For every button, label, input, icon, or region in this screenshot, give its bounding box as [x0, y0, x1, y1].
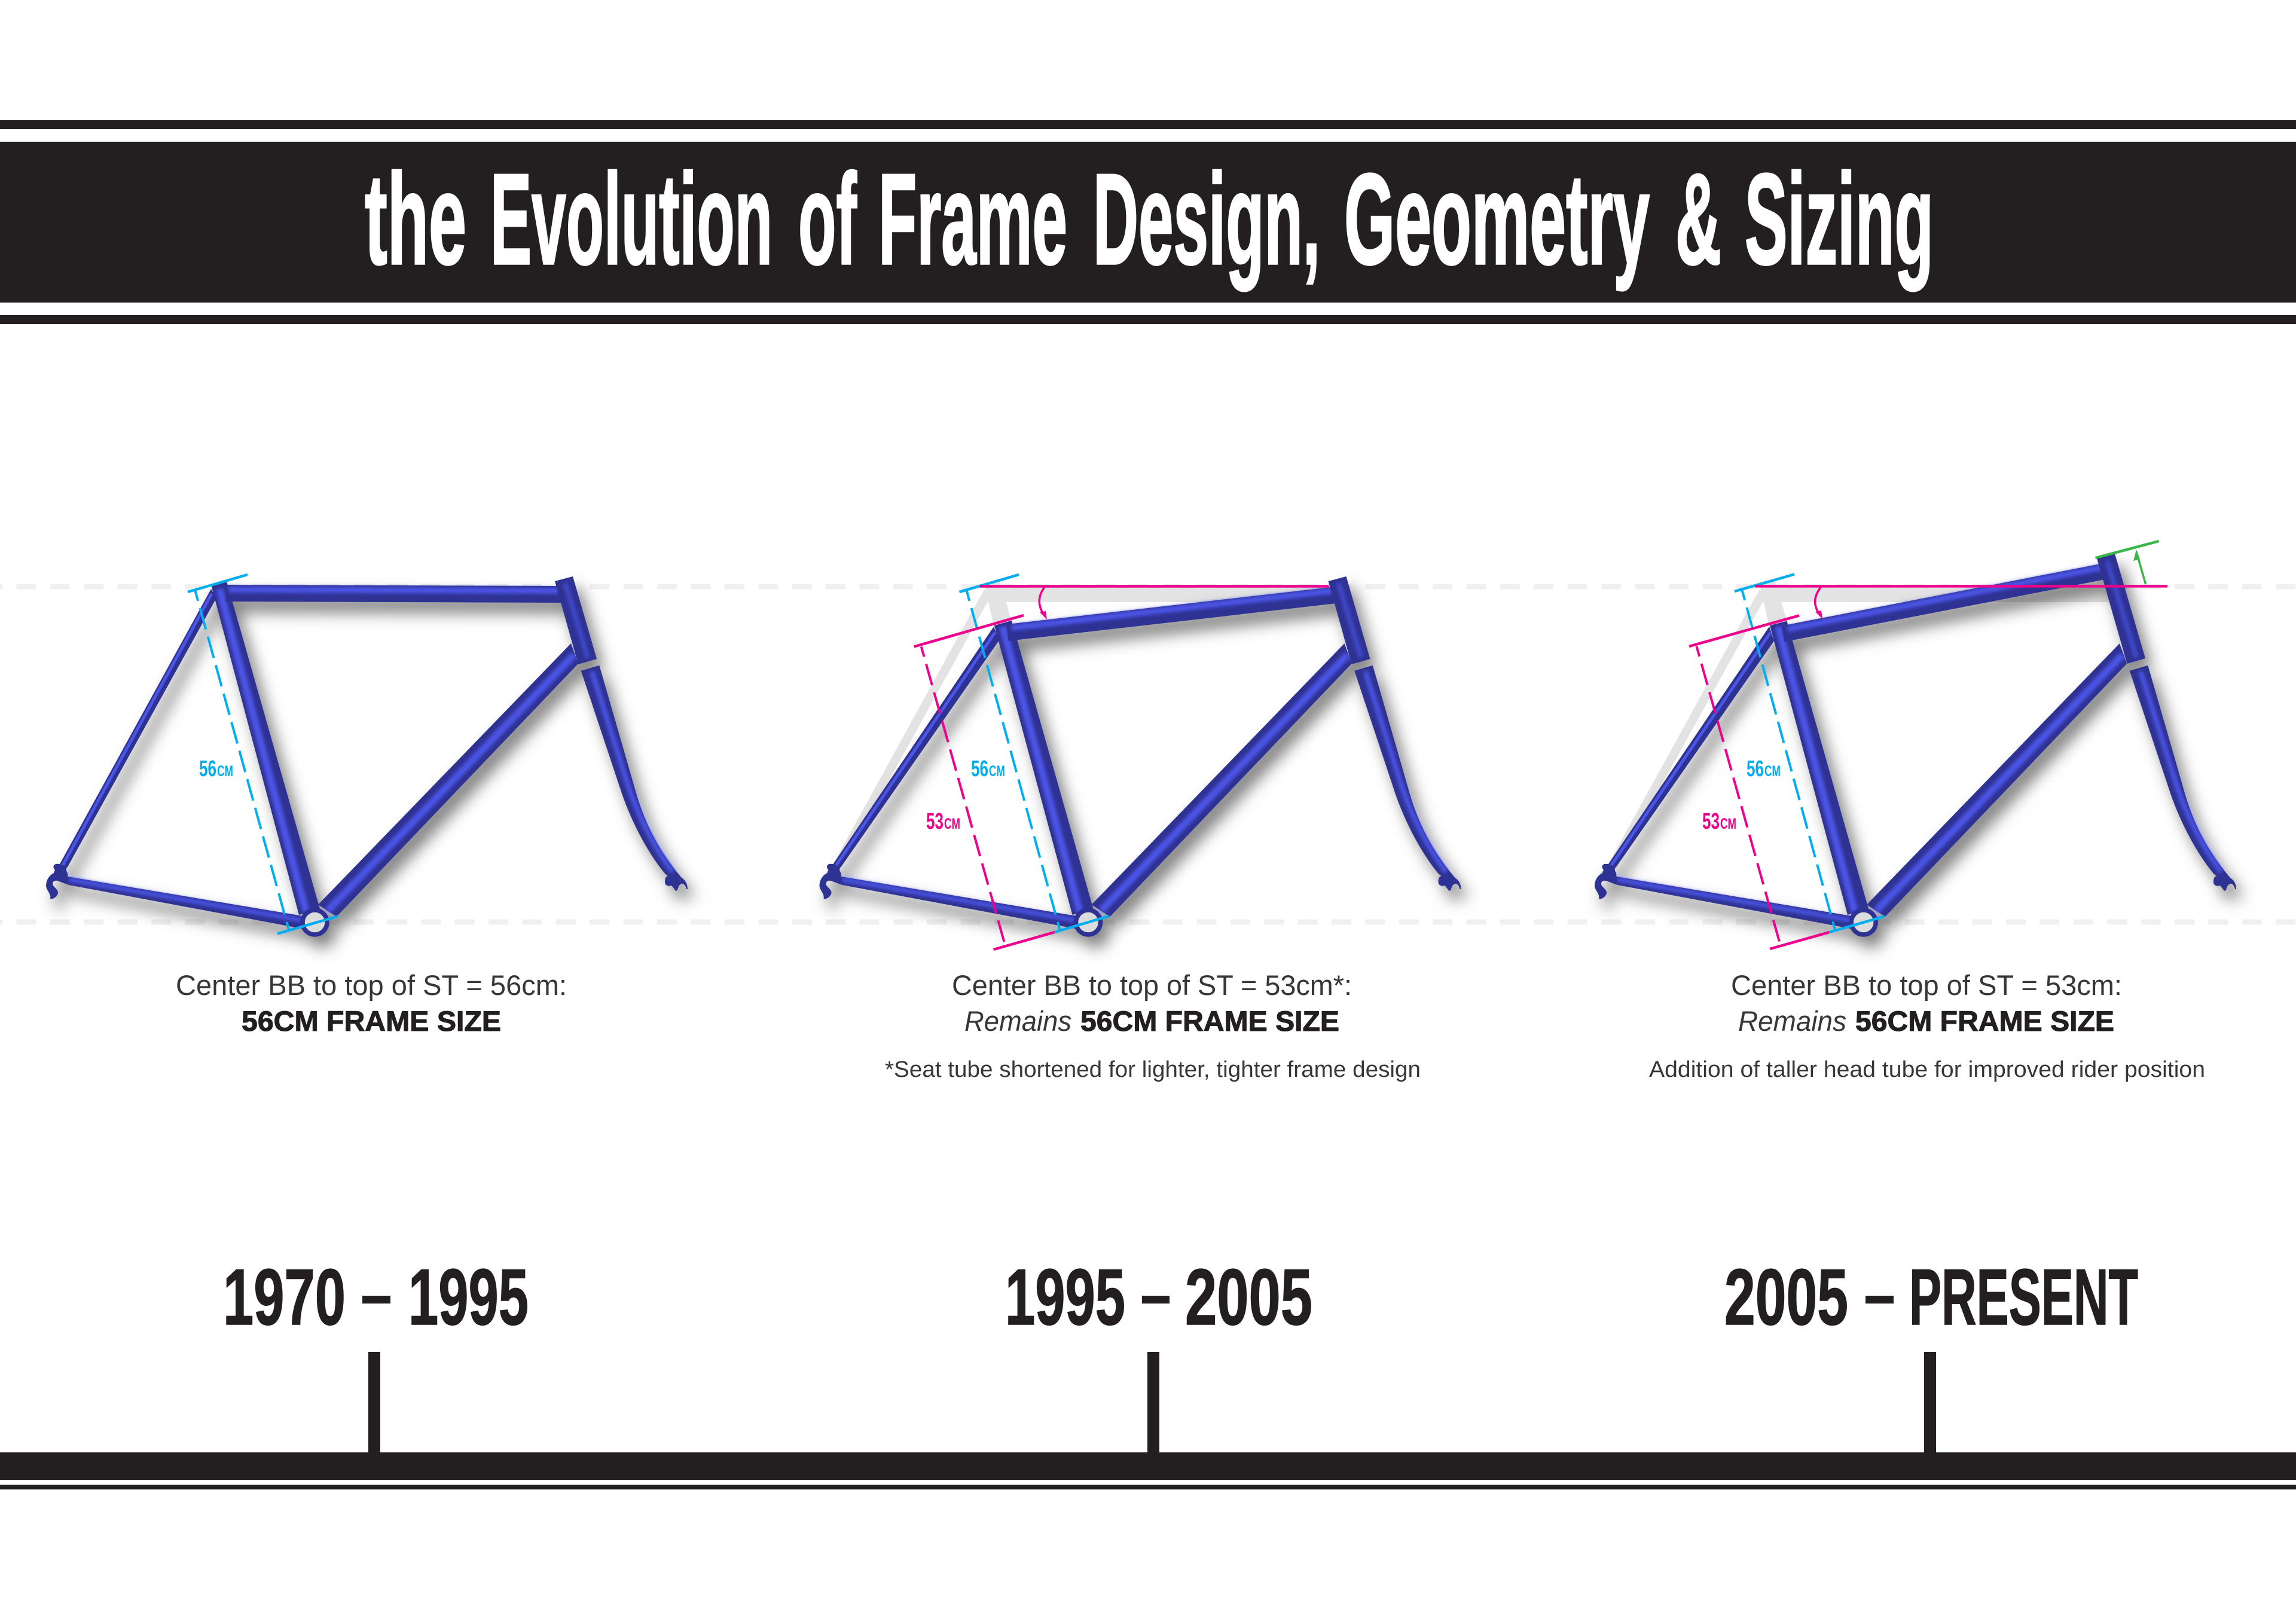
frame 2 caption: Center BB to top of ST = 53cm*:	[952, 969, 1352, 1001]
seat tube	[1770, 621, 1868, 915]
frame 3: 2005-present	[1595, 541, 2236, 1082]
frame 2 caption	[885, 969, 1421, 1082]
title: of	[798, 146, 857, 291]
frame 2 53cm label: 53	[926, 809, 944, 834]
frame 3 56cm label: CM	[1764, 763, 1781, 780]
era 2005-present: PRESENT	[1909, 1253, 2138, 1342]
title: &	[1675, 146, 1721, 291]
timeline	[0, 1253, 2296, 1489]
frame 3 caption	[1649, 969, 2205, 1082]
head tube	[555, 576, 597, 664]
era 1995-2005: 2005	[1185, 1253, 1312, 1342]
title banner: Sizing	[1745, 146, 1934, 291]
frame 3 angle arrow	[1815, 587, 1822, 619]
chain stay	[1616, 877, 1852, 929]
bottom bracket	[303, 910, 327, 935]
era 1970-1995	[223, 1253, 529, 1454]
chain stay	[841, 877, 1076, 929]
seat stay	[1608, 627, 1774, 867]
down tube	[1092, 643, 1351, 917]
frame 3 56cm label: 56	[1747, 756, 1764, 782]
frame 1 caption	[176, 969, 567, 1037]
seat stay	[60, 589, 216, 867]
title: Frame	[878, 146, 1067, 291]
frame 1 56cm label: 56	[199, 756, 216, 782]
frame 3 caption: Center BB to top of ST = 53cm:	[1731, 969, 2122, 1001]
top tube	[1783, 567, 2106, 634]
head tube	[1329, 576, 1370, 664]
frame 2 56cm label: CM	[989, 763, 1005, 780]
era 1995-2005	[1005, 1253, 1312, 1454]
title: Design,	[1093, 146, 1320, 291]
frame 3 pink 53cm measurement	[1689, 586, 2167, 949]
frame 1 tubes	[46, 576, 688, 935]
frame 1 blue 56cm measurement	[188, 575, 338, 934]
timeline bar	[0, 1452, 2296, 1489]
frame 3 caption: Remains	[1738, 1005, 1846, 1037]
frame 2 53cm label: CM	[944, 816, 960, 832]
seat tube	[211, 581, 320, 915]
down tube	[318, 643, 578, 917]
era 2005-present: 2005	[1724, 1253, 1848, 1342]
seat stay	[833, 627, 999, 867]
frame 1: 1970-1995	[46, 575, 688, 1037]
fork	[581, 666, 688, 891]
frame 3 green head tube rise	[2095, 541, 2159, 584]
frame 3 53cm label: CM	[1720, 816, 1736, 832]
frame 1 caption: Center BB to top of ST = 56cm:	[176, 969, 567, 1001]
title banner	[0, 120, 2296, 324]
frame 3 ghost of previous geometry	[1608, 581, 2109, 867]
frame 2 blue 56cm measurement	[959, 575, 1109, 932]
fork	[2130, 666, 2236, 891]
head tube	[2097, 554, 2145, 664]
title: Geometry	[1344, 146, 1650, 291]
frame 2 angle arrow	[1039, 587, 1047, 619]
down tube	[1867, 643, 2127, 917]
fork	[1354, 666, 1461, 891]
reference dashed lines	[0, 587, 2296, 922]
era 1970-1995: 1970	[223, 1253, 346, 1342]
frame 2 caption: *Seat tube shortened for lighter, tighter frame design	[885, 1057, 1421, 1082]
era 1970-1995: 1995	[408, 1253, 529, 1342]
chain stay	[68, 877, 303, 929]
frame 3 blue 56cm measurement	[1735, 574, 1885, 932]
era 2005-present	[1724, 1253, 2138, 1454]
bottom bracket	[1076, 910, 1100, 935]
frame 2 ghost of previous geometry	[833, 581, 1333, 867]
frame 3 caption: 56CM FRAME SIZE	[1855, 1005, 2114, 1037]
frame 2 56cm label: 56	[971, 756, 988, 782]
frame 2 caption: Remains	[964, 1005, 1071, 1037]
title: the	[365, 146, 466, 291]
frame 2: 1995-2005	[819, 575, 1461, 1082]
bottom bracket	[1851, 910, 1876, 935]
rear dropout	[1595, 864, 1617, 899]
frame 1 56cm label: CM	[217, 763, 233, 780]
top tube	[226, 590, 562, 594]
frame 3 tubes	[1595, 554, 2236, 935]
title: Evolution	[490, 146, 773, 291]
era 1995-2005: 1995	[1005, 1253, 1125, 1342]
top tube	[1007, 591, 1336, 633]
rear dropout	[819, 864, 842, 899]
seat tube	[994, 621, 1093, 915]
frame 2 pink 53cm measurement	[914, 586, 1329, 950]
frame 1 caption: 56CM FRAME SIZE	[242, 1005, 501, 1037]
title	[365, 146, 1934, 291]
frame 2 caption: 56CM FRAME SIZE	[1080, 1005, 1339, 1037]
frame 3 caption: Addition of taller head tube for improved rider position	[1649, 1057, 2205, 1082]
frame 2 tubes	[819, 576, 1461, 935]
rear dropout	[46, 864, 69, 899]
frame 3 53cm label: 53	[1702, 809, 1720, 834]
